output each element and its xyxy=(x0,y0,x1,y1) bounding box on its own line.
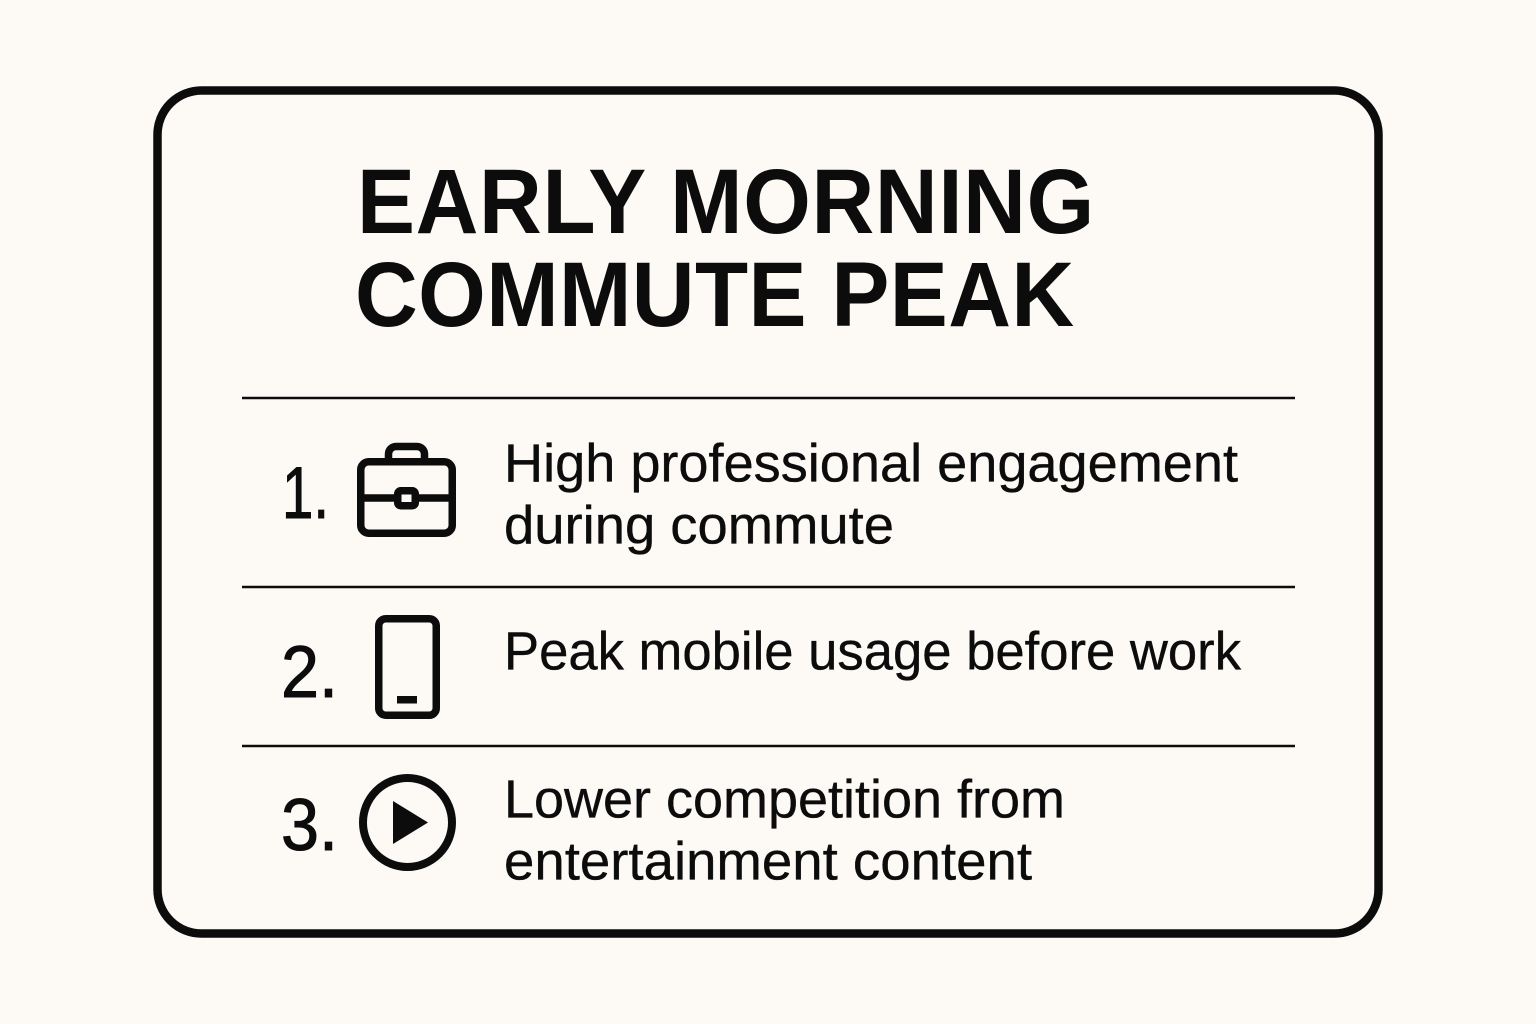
text: row 1 description: during commute xyxy=(504,496,894,556)
title xyxy=(355,150,1094,345)
text: row 3 description: entertainment content xyxy=(504,832,1032,892)
number 1: 1. xyxy=(282,453,329,534)
icon: briefcase xyxy=(360,446,453,533)
number 2: 2. xyxy=(281,632,338,713)
row 1: professional engagement xyxy=(282,434,1238,556)
text: row 1 description: High professional engagement xyxy=(504,434,1238,494)
title: EARLY MORNING xyxy=(357,150,1094,252)
panel: rounded card xyxy=(158,90,1378,934)
text: row 1 description xyxy=(504,434,1238,556)
icon: smartphone xyxy=(379,619,436,715)
icon: play button xyxy=(363,778,452,867)
text: row 2 description: Peak mobile usage before work xyxy=(504,622,1242,682)
text: row 3 description xyxy=(504,770,1065,892)
row 2: mobile usage xyxy=(281,619,1242,715)
title: COMMUTE PEAK xyxy=(355,243,1074,345)
number 3: 3. xyxy=(281,785,338,866)
text: row 3 description: Lower competition from xyxy=(504,770,1065,830)
row 3: lower competition xyxy=(281,770,1065,892)
